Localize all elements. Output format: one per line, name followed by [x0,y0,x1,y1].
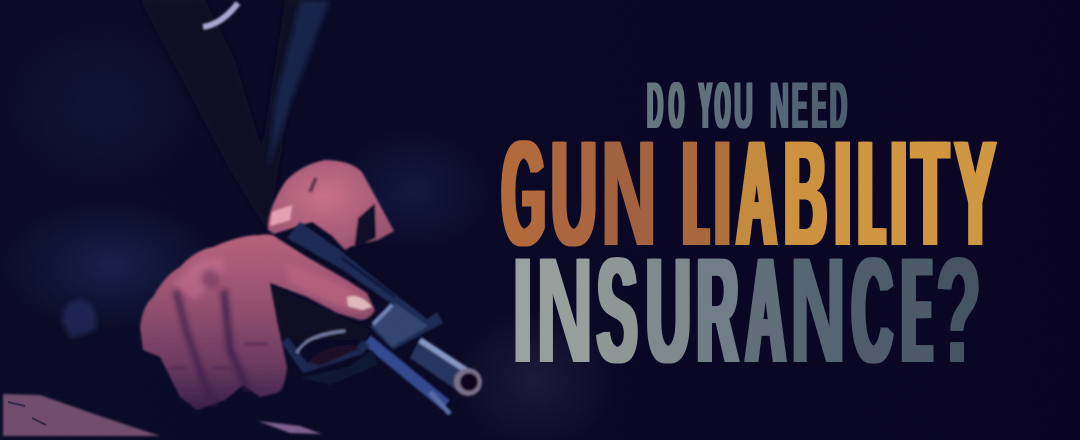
heading line: gun liability: B [784,109,826,277]
pistol rail [367,340,450,414]
heading line: insurance: ? [936,226,981,394]
heading line: gun liability: L [860,109,884,277]
trigger guard [270,285,378,385]
collar highlight [203,3,238,27]
heading line: insurance: U [646,226,691,394]
heading line: gun liability: L [684,109,706,277]
pistol slide [287,222,443,350]
heading line: gun liability: N [601,109,657,277]
heading line: gun liability: Y [955,109,995,277]
heading line: gun liability: U [551,109,597,277]
heading line: do you need: D [647,69,663,142]
heading line: do you need: U [734,69,753,142]
rear hand [268,160,394,250]
heading line: gun liability: I [829,109,856,277]
heading line: gun liability: T [912,109,949,277]
heading line: do you need: Y [699,69,711,142]
jacket [2,0,500,338]
heading line: do you need: D [830,69,847,142]
heading line: gun liability: I [708,109,735,277]
heading line: insurance: N [536,226,593,394]
heading line: do you need: O [669,69,684,142]
heading line: insurance: E [903,226,931,394]
heading line: gun liability: I [885,109,912,277]
heading line: gun liability: A [737,109,776,277]
heading line: do you need: E [812,69,826,142]
heading line: insurance: C [852,226,892,394]
front hand [140,234,375,410]
pistol barrel [410,338,482,396]
heading line: insurance: I [509,226,537,394]
heading line: do you need: E [792,69,808,142]
heading line: insurance: N [790,226,846,394]
dim table surface [450,290,620,440]
wood surface [3,394,160,436]
heading line: insurance: R [697,226,738,394]
heading line: do you need: O [715,69,730,142]
heading line: gun liability: G [502,109,545,277]
heading line: do you need: N [770,69,789,142]
heading line: insurance: A [746,226,785,394]
reflection strip [258,421,322,434]
heading line: insurance: S [597,226,638,394]
